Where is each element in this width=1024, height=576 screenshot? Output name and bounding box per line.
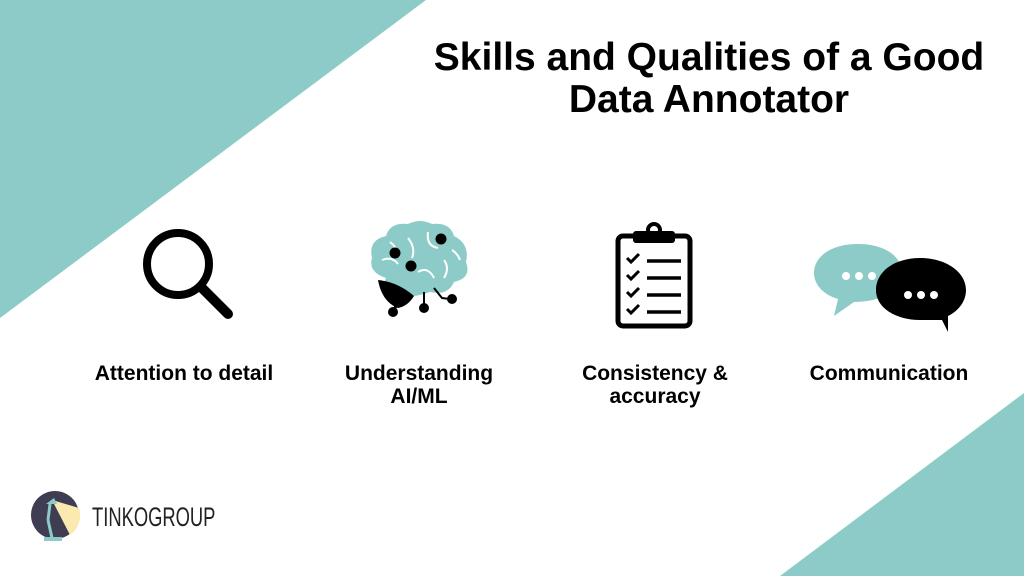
label: consistency: accuracy [609, 385, 701, 408]
label: AI/ML: Understanding [345, 362, 493, 385]
icon: speech bubbles [814, 244, 966, 332]
title: Data Annotator [569, 78, 849, 121]
logo [31, 491, 215, 541]
title: Skills and Qualities of a Good [434, 36, 984, 79]
label: communication: Communication [810, 362, 968, 385]
logo text: TINKOGROUP [92, 502, 215, 532]
label: AI/ML: AI/ML [390, 385, 448, 408]
title [434, 36, 984, 121]
label: attention: Attention to detail [95, 362, 273, 385]
label: consistency: Consistency & [582, 362, 728, 385]
logo icon [31, 491, 80, 541]
icon: magnifying glass [143, 229, 233, 319]
label: AI/ML [345, 362, 493, 408]
icon: brain [371, 221, 468, 317]
label: consistency [582, 362, 728, 408]
icon: clipboard [616, 222, 692, 328]
